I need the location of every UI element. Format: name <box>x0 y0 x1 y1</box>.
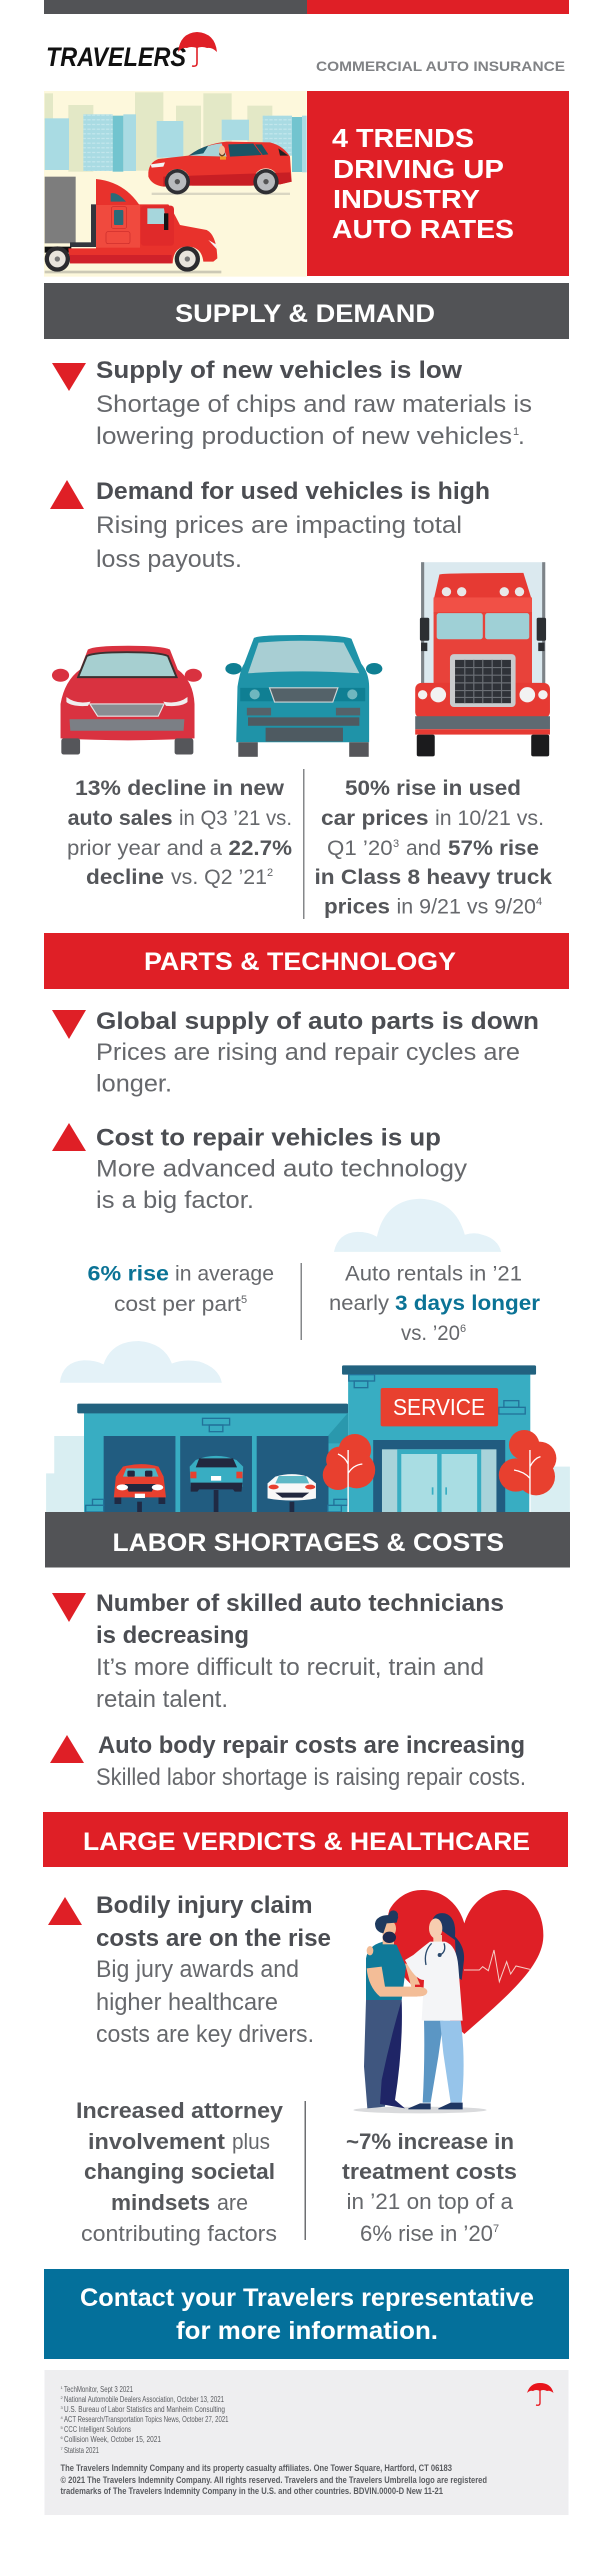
bodily injury text block <box>96 1892 331 2048</box>
parts text block: Prices are rising and repair cycles are <box>96 1039 520 1066</box>
supply text block: 1 <box>513 426 519 438</box>
stats: attorney involvement: plus <box>232 2129 270 2154</box>
stats: new auto sales: 22.7% <box>228 837 292 860</box>
repair cost text block: Cost to repair vehicles is up <box>96 1124 441 1152</box>
repair cost text block <box>96 1124 468 1214</box>
technician text block: Number of skilled auto technicians <box>96 1590 504 1617</box>
teal car on lift <box>190 1456 243 1512</box>
hero title panel <box>307 91 569 276</box>
section header: large verdicts and healthcare <box>43 1812 568 1867</box>
section header: labor shortages and costs <box>45 1512 570 1568</box>
footnotes: CCC Intelligent Solutions <box>64 2425 131 2434</box>
red car on lift <box>114 1464 166 1512</box>
stat: cost per part: cost per part <box>114 1292 241 1316</box>
icons: vehicles front view <box>52 562 550 757</box>
stats: attorney involvement: contributing factors <box>81 2221 277 2246</box>
bodily injury text block: Big jury awards and <box>96 1956 299 1983</box>
stats: used car prices: in 9/21 vs 9/20 <box>396 894 536 918</box>
section header: parts and technology <box>44 933 569 989</box>
footnotes <box>60 2385 229 2455</box>
hero title panel: AUTO RATES <box>332 216 514 244</box>
bodily injury text block: costs are on the rise <box>96 1925 331 1952</box>
doctor <box>405 1913 464 2109</box>
stats: new auto sales: vs. Q2 ’21 <box>171 865 267 889</box>
legal text: The Travelers Indemnity Company and its property casualty affiliates. One Tower Square, Hartford, CT 06183 <box>60 2463 452 2473</box>
section header: parts and technology: PARTS & TECHNOLOGY <box>144 948 456 976</box>
parts text block <box>96 1008 539 1098</box>
footnotes: 6 <box>60 2435 64 2440</box>
footnotes: U.S. Bureau of Labor Statistics and Manheim Consulting <box>64 2405 225 2414</box>
stats: used car prices: Q1 ’20 <box>327 836 393 860</box>
repair cost text block: is a big factor. <box>96 1187 254 1214</box>
icon: up arrow <box>48 1897 82 1925</box>
red car side view <box>148 142 292 195</box>
stats: attorney involvement: are <box>217 2190 248 2215</box>
footnotes: 4 <box>60 2415 64 2420</box>
footnotes: 5 <box>60 2425 64 2430</box>
stat: auto rentals: 3 days longer <box>395 1292 540 1315</box>
footnotes: ACT Research/Transportation Topics News, October 27, 2021 <box>64 2415 229 2424</box>
legal text: © 2021 The Travelers Indemnity Company. All rights reserved. Travelers and the Travelers Umbrella logo are registered <box>60 2475 487 2485</box>
supply text block: lowering production of new vehicles <box>96 423 512 450</box>
footnotes: 2 <box>60 2395 64 2400</box>
footnotes: National Automobile Dealers Association, October 13, 2021 <box>64 2395 224 2404</box>
stats: treatment costs: in ’21 on top of a <box>346 2189 513 2214</box>
legal text <box>60 2463 487 2496</box>
stats: new auto sales: 2 <box>267 867 273 879</box>
demand text block: loss payouts. <box>96 546 242 573</box>
footnotes: Statista 2021 <box>64 2446 99 2455</box>
stats: new auto sales: prior year and a <box>67 836 222 860</box>
footer panel <box>44 2370 568 2515</box>
section header: supply and demand <box>44 283 569 339</box>
divider <box>304 2101 306 2240</box>
stat: cost per part: in average <box>175 1262 274 1286</box>
stats: treatment costs: ~7% increase in <box>346 2129 514 2154</box>
stats: used car prices: prices <box>324 896 390 918</box>
parts text block: Global supply of auto parts is down <box>96 1008 539 1035</box>
footnotes: TechMonitor, Sept 3 2021 <box>64 2385 133 2394</box>
heart <box>386 1890 543 2034</box>
repair cost text block: More advanced auto technology <box>96 1156 468 1183</box>
supply text block: Shortage of chips and raw materials is <box>96 391 532 418</box>
teal suv <box>225 635 382 757</box>
stats: new auto sales: 13% decline in new <box>75 777 285 800</box>
stats: attorney involvement: mindsets <box>111 2190 210 2215</box>
stats: used car prices: and <box>406 836 441 860</box>
stats: new auto sales: in Q3 ’21 vs. <box>179 806 292 830</box>
hero title panel: INDUSTRY <box>333 186 480 214</box>
trees <box>323 1430 556 1495</box>
icon: up arrow <box>52 1123 86 1151</box>
stat: cost per part: 5 <box>241 1294 247 1306</box>
auto service building illustration: SERVICE <box>393 1394 485 1420</box>
icon: up arrow <box>50 1735 84 1763</box>
parts text block: longer. <box>96 1070 172 1098</box>
cloud <box>334 1199 501 1252</box>
stats: new auto sales: decline <box>86 866 164 889</box>
stats: new auto sales <box>67 777 292 889</box>
icon: down arrow <box>52 1593 86 1622</box>
hero title panel: DRIVING UP <box>333 156 504 184</box>
stats: used car prices <box>314 777 552 918</box>
stats: treatment costs: treatment costs <box>342 2159 517 2184</box>
bodily injury text block: costs are key drivers. <box>96 2021 314 2048</box>
stats: used car prices: 4 <box>536 896 542 908</box>
legal text: trademarks of The Travelers Indemnity Company in the U.S. and other countries. BDVIN.0000-D New 11-21 <box>60 2486 443 2496</box>
report label: COMMERCIAL AUTO INSURANCE <box>316 58 565 74</box>
bodily injury text block: higher healthcare <box>96 1989 278 2016</box>
supply text block: . <box>518 423 525 450</box>
section header: labor shortages and costs: LABOR SHORTAGES & COSTS <box>112 1529 504 1557</box>
body repair text block: Auto body repair costs are increasing <box>98 1732 525 1759</box>
stat: auto rentals <box>329 1262 540 1345</box>
stat: cost per part <box>88 1262 274 1316</box>
red semi truck side view <box>45 177 221 273</box>
icon: umbrella <box>527 2383 554 2405</box>
stats: attorney involvement: changing societal <box>84 2159 275 2184</box>
hero illustration <box>44 91 307 277</box>
stats: used car prices: 3 <box>393 838 399 850</box>
section header: supply and demand: SUPPLY & DEMAND <box>175 300 435 328</box>
technician text block: is decreasing <box>96 1622 249 1649</box>
stat: auto rentals: Auto rentals in ’21 <box>345 1262 522 1286</box>
icon: up arrow <box>50 480 84 509</box>
stats: used car prices: 57% rise <box>448 837 539 860</box>
technician text block: It’s more difficult to recruit, train and <box>96 1654 484 1681</box>
footnotes: 3 <box>60 2405 64 2410</box>
call to action banner: Contact your Travelers representative <box>80 2284 534 2312</box>
supply text block <box>96 357 532 450</box>
demand text block <box>96 478 490 573</box>
bodily injury text block: Bodily injury claim <box>96 1892 312 1919</box>
stats: attorney involvement: involvement <box>88 2129 226 2154</box>
demand text block: Rising prices are impacting total <box>96 512 462 539</box>
stats: used car prices: car prices <box>321 807 428 830</box>
body repair text block: Skilled labor shortage is raising repair costs. <box>96 1764 526 1791</box>
white car on lift <box>268 1474 316 1512</box>
stats: treatment costs: 6% rise in ’20 <box>360 2221 493 2246</box>
stat: auto rentals: nearly <box>329 1291 389 1315</box>
service sign <box>381 1388 498 1426</box>
illustration: doctor, patient and heart <box>353 1890 543 2113</box>
call to action banner: for more information. <box>176 2317 438 2345</box>
footnotes: 1 <box>60 2385 64 2390</box>
technician text block: retain talent. <box>96 1686 228 1713</box>
Travelers logo: TRAVELERS <box>46 42 186 72</box>
stat: auto rentals: 6 <box>460 1323 466 1335</box>
hero title panel: 4 TRENDS <box>332 125 474 153</box>
red truck <box>415 562 550 756</box>
top color bar <box>44 0 569 14</box>
body repair text block <box>96 1732 526 1791</box>
red sedan <box>52 646 202 755</box>
stats: used car prices: in Class 8 heavy truck <box>314 866 552 889</box>
cloud <box>60 1341 222 1383</box>
stats: attorney involvement: Increased attorney <box>76 2098 283 2123</box>
demand text block: Demand for used vehicles is high <box>96 478 490 505</box>
stats: used car prices: in 10/21 vs. <box>435 806 544 830</box>
auto service building illustration <box>46 1365 570 1512</box>
divider <box>300 1263 302 1340</box>
section header: large verdicts and healthcare: LARGE VERDICTS & HEALTHCARE <box>83 1828 530 1856</box>
stats: attorney involvement <box>76 2098 283 2246</box>
divider <box>303 769 304 919</box>
footnotes: 7 <box>60 2446 64 2451</box>
footnotes: Collision Week, October 15, 2021 <box>64 2435 161 2444</box>
call to action banner <box>44 2269 569 2359</box>
stat: cost per part: 6% rise <box>88 1262 169 1286</box>
stat: auto rentals: vs. ’20 <box>401 1321 460 1345</box>
patient <box>364 1910 427 2108</box>
technician text block <box>96 1590 504 1713</box>
stats: treatment costs: 7 <box>493 2223 499 2235</box>
icon: down arrow <box>52 1010 86 1039</box>
supply text block: Supply of new vehicles is low <box>96 357 462 384</box>
stats: treatment costs <box>342 2129 517 2246</box>
stats: new auto sales: auto sales <box>68 807 173 830</box>
stats: used car prices: 50% rise in used <box>345 777 521 800</box>
icon: down arrow <box>52 363 86 391</box>
